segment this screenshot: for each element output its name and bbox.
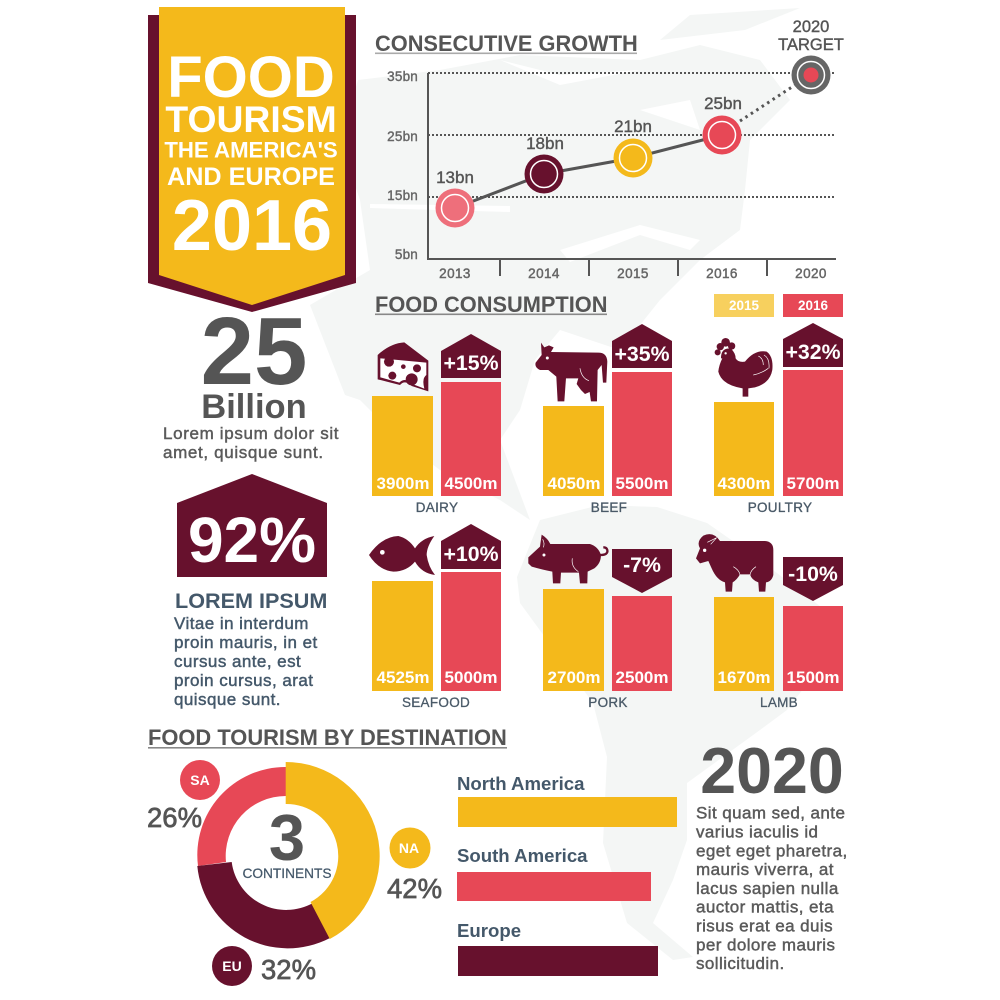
x axis labels <box>439 266 827 281</box>
text block: lorem ipsum: Vitae in interdum <box>174 614 309 633</box>
category: dairy: 3900m <box>377 474 429 493</box>
title text: AND EUROPE <box>167 163 335 191</box>
text block: 2020 outlook <box>696 735 848 973</box>
target dotted line <box>740 85 795 121</box>
category: pork <box>528 535 672 710</box>
text block: 2020 outlook: sollicitudin. <box>696 954 785 973</box>
stat: 25 billion: amet, quisque sunt. <box>163 443 324 462</box>
data values: 21bn <box>614 117 652 136</box>
icon: chicken <box>715 338 773 397</box>
category: lamb <box>696 534 843 710</box>
category: poultry: +32% <box>785 340 841 364</box>
background: pale world map <box>310 8 825 960</box>
trend line <box>455 135 722 208</box>
stat: 92 percent badge <box>177 474 327 577</box>
donut chart: destinations <box>147 760 442 986</box>
category: dairy: 4500m <box>445 474 497 493</box>
data values: 25bn <box>704 94 742 113</box>
x axis labels: 2020 <box>795 266 827 281</box>
heading: consecutive growth: CONSECUTIVE GROWTH <box>375 31 638 56</box>
text block: 2020 outlook: eget eget pharetra, <box>696 842 848 860</box>
bar chart: destinations: North America <box>457 773 585 794</box>
badge: north america: NA <box>399 840 419 856</box>
legend <box>714 294 843 317</box>
title text <box>164 45 338 266</box>
data values: 13bn <box>436 168 474 187</box>
category: lamb: 1670m <box>718 668 770 687</box>
category: beef: 5500m <box>616 474 668 493</box>
x axis labels: 2013 <box>439 266 471 281</box>
ribbon front <box>159 7 345 305</box>
text block: lorem ipsum: cursus ante, est <box>174 652 301 671</box>
category: pork: PORK <box>588 695 628 710</box>
category: pork: -7% <box>623 553 661 577</box>
title text: FOOD <box>167 45 335 110</box>
category: beef: BEEF <box>591 500 627 515</box>
donut centre label: CONTINENTS <box>243 866 331 881</box>
stat: 92 percent badge: 92% <box>188 504 316 576</box>
icon: fish <box>369 536 435 575</box>
data values <box>436 18 844 187</box>
legend: 2015 <box>729 298 760 313</box>
segment: north america <box>286 762 380 939</box>
badge: europe: EU <box>222 958 242 974</box>
text block: 2020 outlook: per dolore mauris <box>696 935 835 954</box>
category: seafood: 4525m <box>377 668 429 687</box>
y axis labels: 5bn <box>395 247 418 262</box>
title text: TOURISM <box>165 98 337 140</box>
y axis labels: 35bn <box>387 69 418 84</box>
x axis labels: 2016 <box>706 266 738 281</box>
icon: cow <box>535 343 607 401</box>
badge: south america <box>147 760 220 833</box>
icon: sheep <box>696 534 773 592</box>
segment: south america <box>197 767 286 866</box>
category: dairy: +15% <box>443 351 499 375</box>
y axis labels: 25bn <box>387 129 418 144</box>
bar chart: destinations: South America <box>457 845 588 866</box>
title text: THE AMERICA'S <box>164 138 338 162</box>
category: seafood: 5000m <box>445 668 497 687</box>
text block: 2020 outlook: 2020 <box>700 735 844 807</box>
category: lamb: 1500m <box>787 668 839 687</box>
category: lamb: LAMB <box>760 695 798 710</box>
title text: 2016 <box>172 186 332 266</box>
text block: lorem ipsum <box>174 588 327 709</box>
category: beef: 4050m <box>548 474 600 493</box>
data points <box>436 56 830 228</box>
text block: 2020 outlook: mauris viverra, at <box>696 860 834 879</box>
stat: 25 billion: Billion <box>201 388 307 426</box>
text block: 2020 outlook: Sit quam sed, ante <box>696 803 845 822</box>
badge: north america: 42% <box>387 873 442 904</box>
donut centre label: 3 <box>269 801 305 874</box>
legend: 2016 <box>798 298 829 313</box>
badge: south america: SA <box>190 772 210 788</box>
banner: title ribbon <box>148 7 356 312</box>
category: seafood: SEAFOOD <box>402 695 470 710</box>
text block: lorem ipsum: proin cursus, arat <box>174 671 313 690</box>
category: beef <box>535 324 672 515</box>
text block: 2020 outlook: auctor mattis, eta <box>696 898 834 917</box>
donut centre label <box>243 801 331 881</box>
category: poultry: 5700m <box>787 474 839 493</box>
icon: pig <box>528 535 607 583</box>
y axis labels: 15bn <box>387 188 418 203</box>
bar chart: destinations <box>457 773 677 976</box>
badge: europe <box>212 946 316 986</box>
text block: 2020 outlook: risus erat ea duis <box>696 917 833 936</box>
category: dairy: DAIRY <box>416 500 458 515</box>
data values: 18bn <box>526 134 564 153</box>
category: seafood: +10% <box>443 542 499 566</box>
x axis labels: 2015 <box>617 266 649 281</box>
badge: europe: 32% <box>261 954 316 985</box>
line chart: consecutive growth <box>387 18 844 281</box>
badge: south america: 26% <box>147 802 202 833</box>
category: pork: 2700m <box>548 668 600 687</box>
data values: 2020 <box>793 18 829 36</box>
ribbon back <box>148 15 356 312</box>
category: pork: 2500m <box>616 668 668 687</box>
text block: lorem ipsum: LOREM IPSUM <box>175 588 327 613</box>
category: poultry: POULTRY <box>748 500 812 515</box>
heading: food consumption: FOOD CONSUMPTION <box>375 292 608 317</box>
stat: 25 billion: 25 <box>201 298 307 405</box>
heading: food tourism by destination: FOOD TOURISM BY DESTINATION <box>148 725 507 750</box>
text block: lorem ipsum: proin mauris, in et <box>174 633 318 652</box>
y axis labels <box>387 69 418 262</box>
category: dairy <box>372 334 501 515</box>
data values: TARGET <box>778 36 844 54</box>
category: poultry <box>714 323 843 515</box>
category: lamb: -10% <box>788 562 838 586</box>
category: seafood <box>369 524 501 710</box>
x axis labels: 2014 <box>528 266 560 281</box>
stat: 25 billion <box>163 298 339 462</box>
category: poultry: 4300m <box>718 474 770 493</box>
category: beef: +35% <box>614 342 670 366</box>
text block: lorem ipsum: quisque sunt. <box>174 690 281 709</box>
icon: cheese <box>378 342 428 391</box>
badge: north america <box>387 828 442 904</box>
stat: 25 billion: Lorem ipsum dolor sit <box>163 424 339 443</box>
text block: 2020 outlook: lacus sapien nulla <box>696 879 839 898</box>
text block: 2020 outlook: varius iaculis id <box>696 822 818 841</box>
bar chart: destinations: Europe <box>457 920 521 941</box>
segment: europe <box>197 862 330 948</box>
